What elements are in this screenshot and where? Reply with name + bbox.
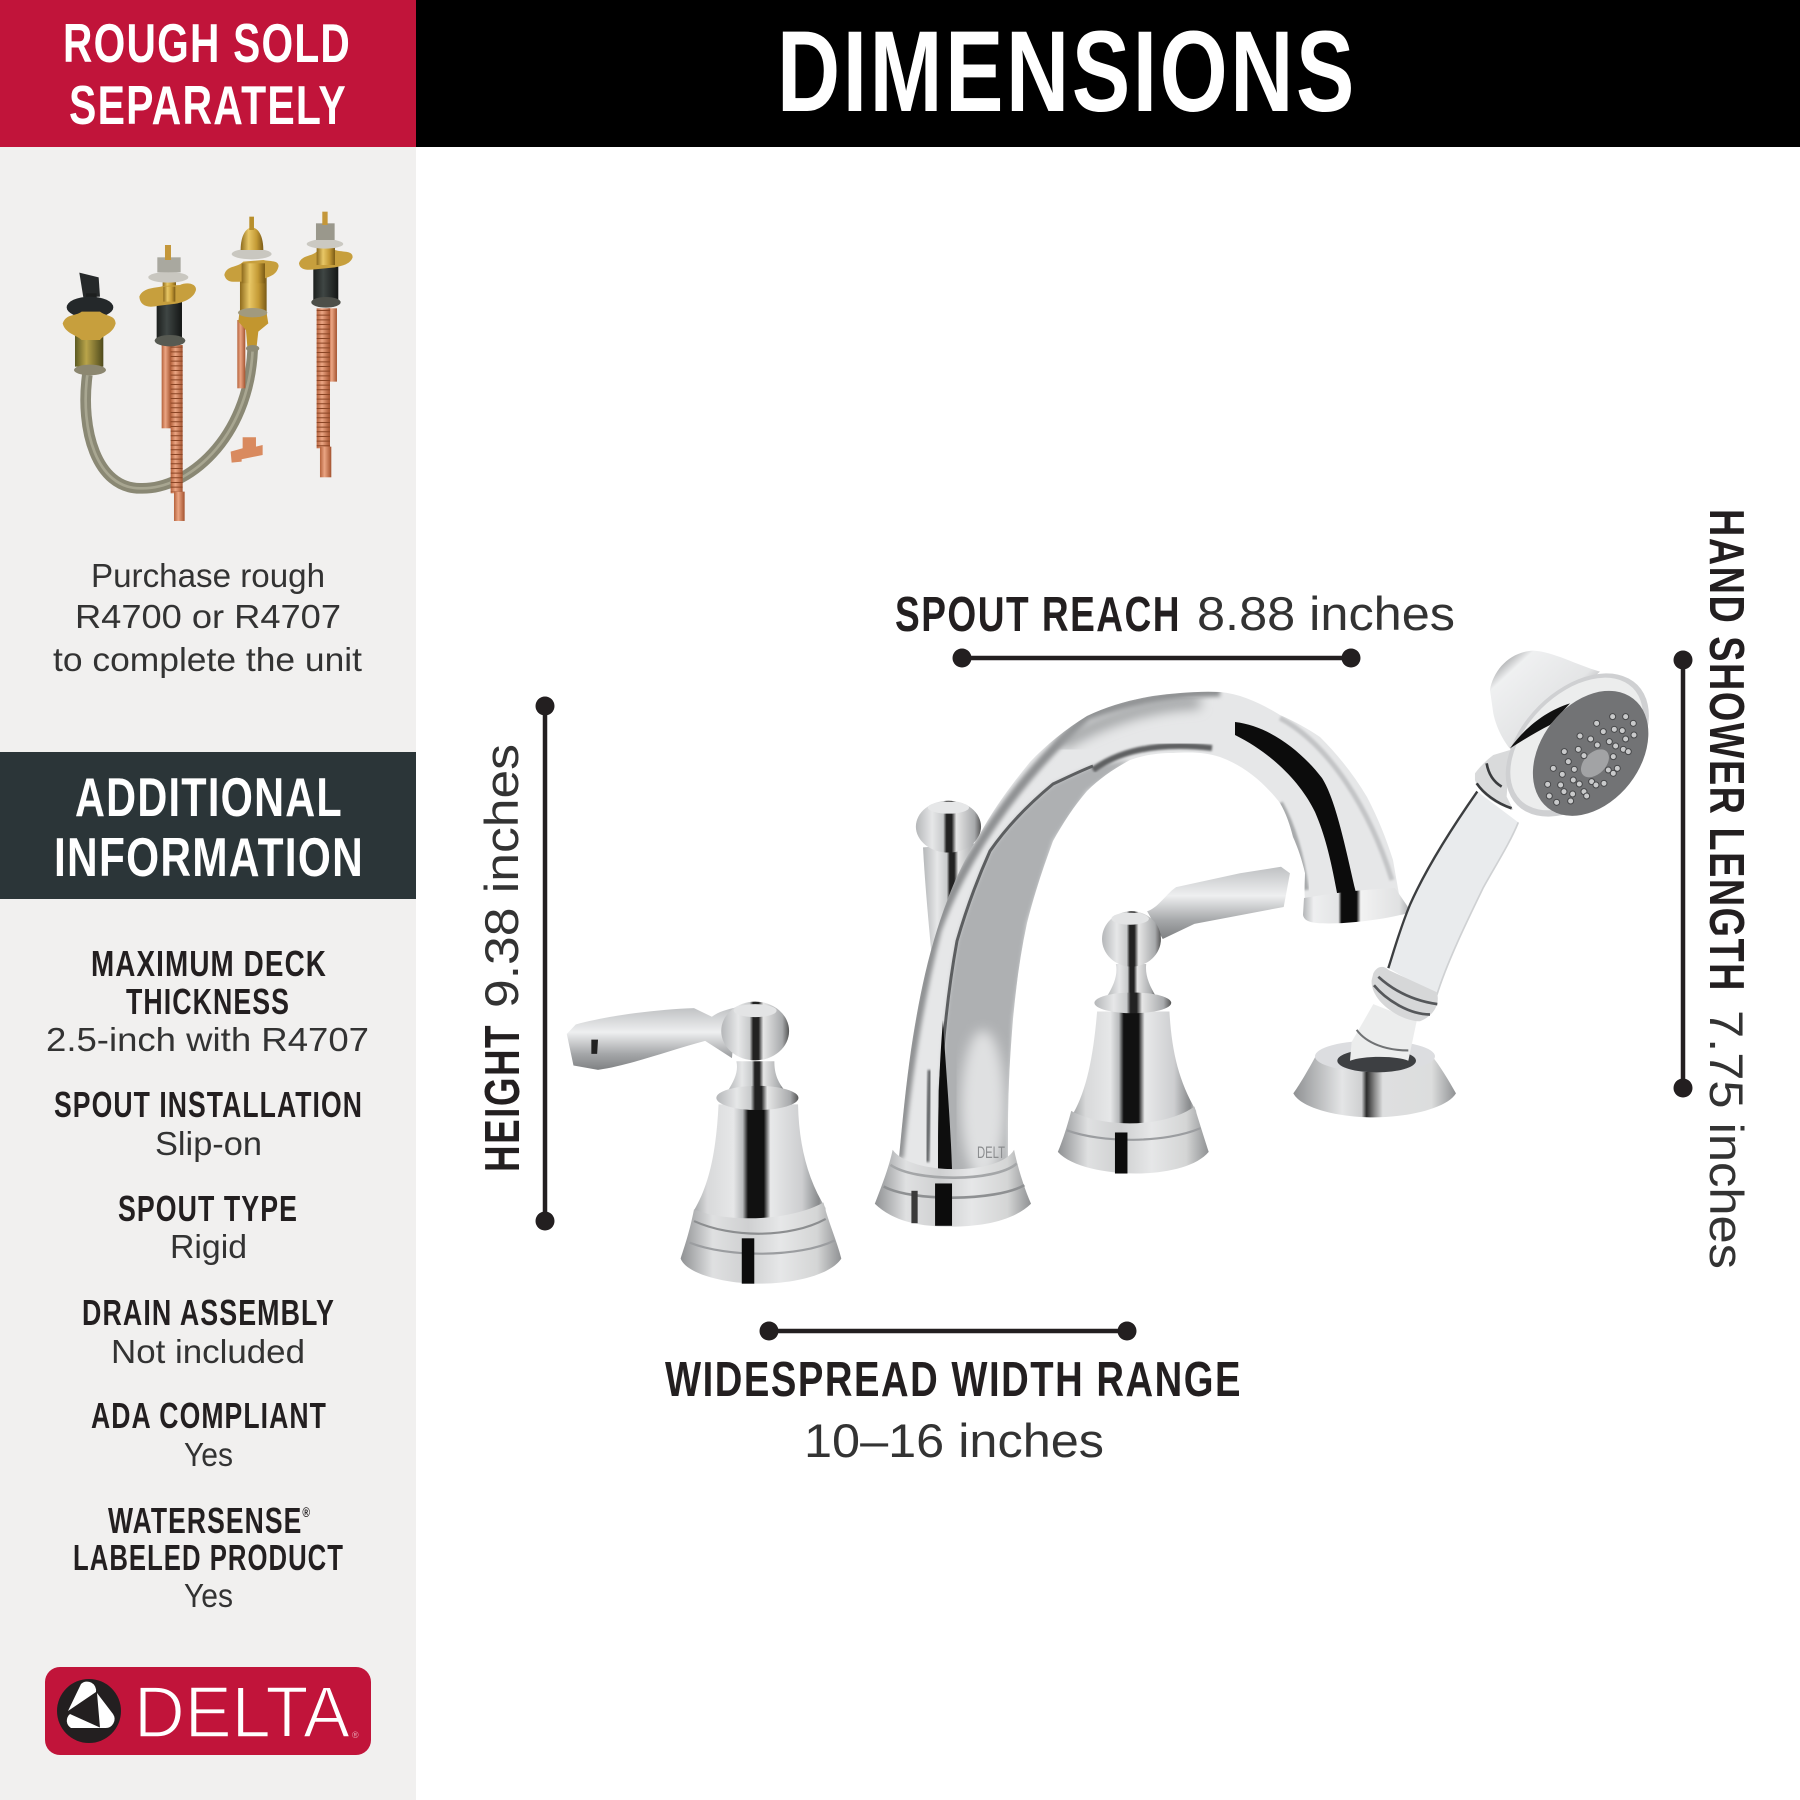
dimension: hand shower length bbox=[1674, 509, 1753, 1269]
faucet: right handle bbox=[1058, 867, 1290, 1174]
banner: rough sold separately: ROUGH SOLD bbox=[63, 12, 351, 74]
dimension: hand shower length: 7.75 inches bbox=[1700, 1010, 1753, 1269]
logo: delta: ® bbox=[352, 1730, 359, 1740]
spec: spout installation: Slip-on bbox=[155, 1125, 262, 1162]
spec: maximum deck thickness: MAXIMUM DECK bbox=[91, 943, 327, 984]
spec: drain assembly: DRAIN ASSEMBLY bbox=[82, 1292, 335, 1333]
faucet: left handle bbox=[567, 1002, 841, 1284]
spec: maximum deck thickness: 2.5-inch with R4707 bbox=[46, 1021, 369, 1058]
arrow: hand shower line bbox=[1674, 650, 1692, 1098]
spec: watersense labeled product: LABELED PRODUCT bbox=[73, 1537, 344, 1578]
text: purchase rough note bbox=[53, 557, 362, 678]
arrow: height line bbox=[536, 696, 554, 1230]
logo: delta bbox=[45, 1667, 371, 1755]
heading: additional information: ADDITIONAL bbox=[75, 766, 343, 828]
dimension: widespread width range: 10–16 inches bbox=[804, 1414, 1104, 1467]
banner: rough sold separately: SEPARATELY bbox=[69, 74, 347, 136]
logo: delta: DELTA bbox=[134, 1673, 350, 1753]
title banner: dimensions bbox=[416, 0, 1800, 147]
text: purchase rough note: to complete the unit bbox=[53, 641, 362, 678]
panel: left sidebar bbox=[0, 0, 416, 1800]
dimension: widespread width range bbox=[665, 1322, 1242, 1467]
spec: ada compliant bbox=[91, 1395, 327, 1473]
faucet: spout bbox=[899, 692, 1399, 1170]
banner: rough sold separately bbox=[0, 0, 416, 147]
dimension: hand shower length: HAND SHOWER LENGTH bbox=[1699, 509, 1753, 992]
spec: drain assembly bbox=[82, 1292, 335, 1370]
text: purchase rough note: R4700 or R4707 bbox=[75, 598, 341, 635]
spec: spout type: Rigid bbox=[170, 1228, 247, 1265]
spout outlet collar bbox=[1303, 888, 1410, 923]
faucet: spout base bbox=[875, 1150, 1031, 1227]
dimension: spout reach bbox=[895, 587, 1455, 668]
text: purchase rough note: Purchase rough bbox=[91, 557, 325, 594]
title banner: dimensions: DIMENSIONS bbox=[777, 8, 1357, 136]
dimension: spout reach: 8.88 inches bbox=[1197, 587, 1455, 640]
spec: ada compliant: ADA COMPLIANT bbox=[91, 1395, 327, 1436]
arrow: spout reach line bbox=[952, 648, 1360, 668]
dimension: height: HEIGHT bbox=[476, 1024, 530, 1172]
spec: maximum deck thickness: THICKNESS bbox=[126, 981, 290, 1022]
spec: watersense labeled product: Yes bbox=[184, 1577, 233, 1614]
spec: ada compliant: Yes bbox=[184, 1436, 233, 1473]
spec: spout installation bbox=[54, 1084, 363, 1162]
spec: spout type bbox=[118, 1188, 298, 1265]
spec: watersense labeled product: ® bbox=[302, 1504, 311, 1520]
dimension: spout reach: SPOUT REACH bbox=[895, 588, 1181, 642]
shower head bbox=[1475, 646, 1676, 844]
heading: additional information bbox=[0, 752, 416, 899]
shower body and base bbox=[1293, 792, 1518, 1117]
dimension: height bbox=[475, 696, 554, 1230]
hand shower bbox=[1293, 646, 1676, 1117]
spec: watersense labeled product: WATERSENSE bbox=[108, 1500, 372, 1541]
spec: watersense labeled product bbox=[73, 1500, 344, 1614]
spec: spout type: SPOUT TYPE bbox=[118, 1188, 298, 1229]
dimension: widespread width range: WIDESPREAD WIDTH RANGE bbox=[665, 1353, 1242, 1407]
dimension: height: 9.38 inches bbox=[475, 744, 528, 1008]
spec: spout installation: SPOUT INSTALLATION bbox=[54, 1084, 363, 1125]
spec: drain assembly: Not included bbox=[111, 1333, 305, 1370]
faucet: back handle stem bbox=[916, 801, 981, 968]
image: rough-in valve kit bbox=[63, 212, 353, 521]
arrow: width line bbox=[760, 1322, 1136, 1340]
heading: additional information: INFORMATION bbox=[54, 826, 364, 888]
spout brand mark: DELT bbox=[977, 1143, 1005, 1162]
spec: maximum deck thickness bbox=[46, 943, 369, 1058]
